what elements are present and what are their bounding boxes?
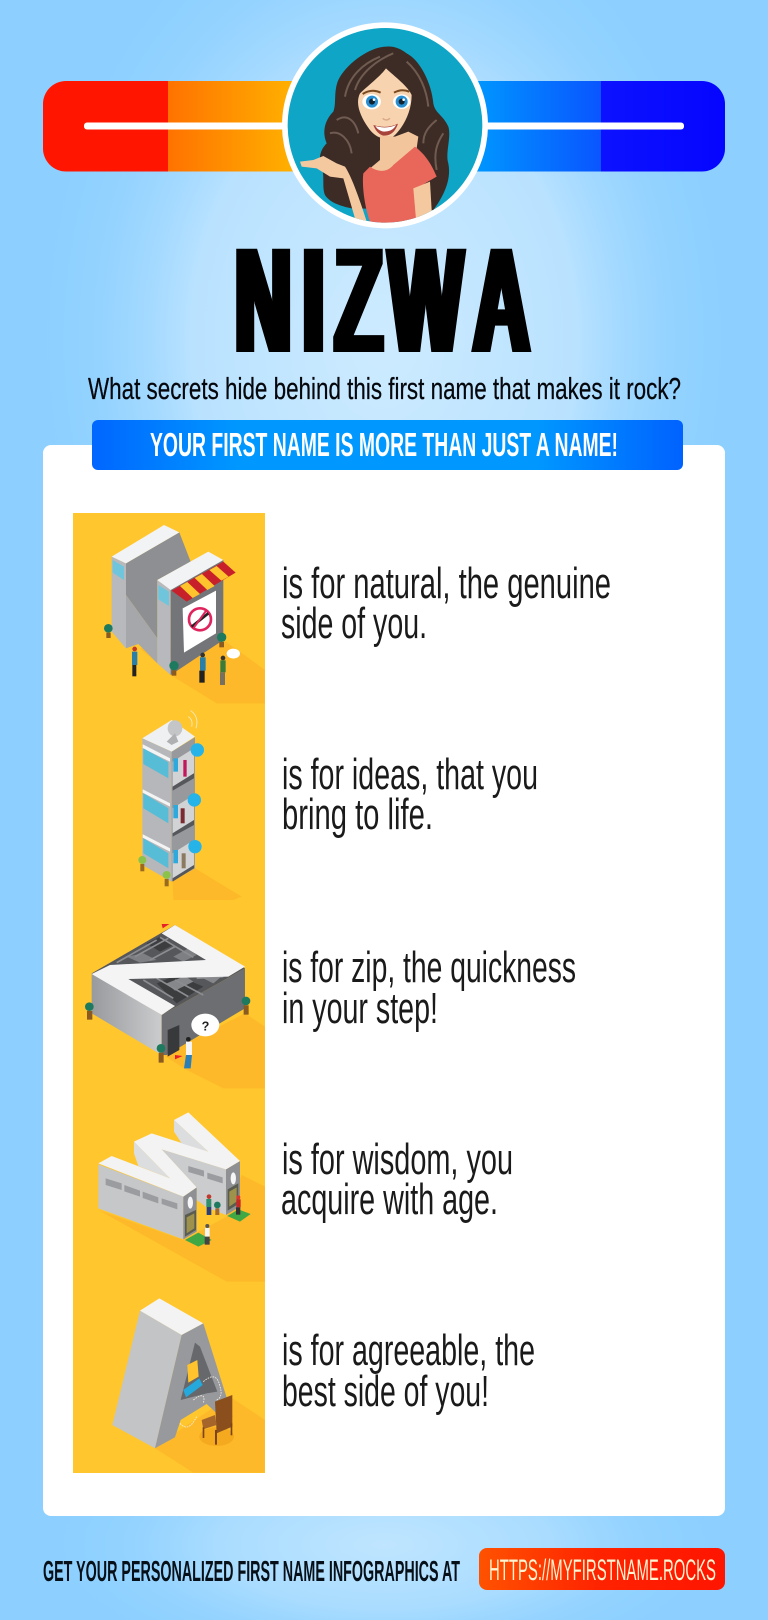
footer url button: [479, 1548, 725, 1590]
row Z text: in your step!: [282, 984, 438, 1033]
row A text: best side of you!: [282, 1367, 489, 1416]
illustration: letter N building: [104, 525, 265, 703]
illustration: letter I building: [138, 711, 242, 900]
row I text: is for ideas, that you: [282, 750, 538, 799]
illustration: letter Z maze: [85, 924, 265, 1088]
row Z text: [282, 943, 576, 1033]
main white panel with letter rows: [43, 445, 725, 1516]
banner: [92, 420, 683, 470]
row W text: acquire with age.: [281, 1175, 498, 1224]
illustration: letter A with chair: [112, 1298, 265, 1473]
row N text: [281, 559, 611, 648]
row Z text: is for zip, the quickness: [282, 943, 576, 992]
yellow illustration column: [73, 513, 265, 1473]
header colour bar with white line: [43, 81, 725, 172]
row A text: [282, 1326, 535, 1416]
row I text: [282, 750, 538, 839]
avatar: woman in circle: [282, 22, 488, 228]
row W text: [281, 1135, 513, 1224]
row N text: side of you.: [281, 599, 427, 648]
illustration: letter Z maze: ?: [202, 1020, 209, 1034]
row I text: bring to life.: [282, 790, 433, 839]
illustration: letter W building: [98, 1112, 265, 1282]
title: NIZWA: NIZWA: [235, 218, 530, 385]
row N text: is for natural, the genuine: [282, 559, 611, 608]
row A text: is for agreeable, the: [282, 1326, 535, 1375]
row W text: is for wisdom, you: [282, 1135, 513, 1184]
